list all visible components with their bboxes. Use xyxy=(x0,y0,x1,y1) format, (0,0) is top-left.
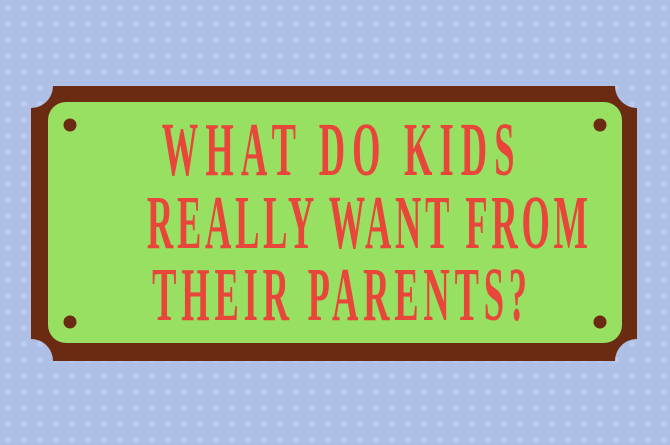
title text: WHAT DO KIDS xyxy=(162,107,515,192)
sign board xyxy=(31,86,637,361)
title text xyxy=(147,107,588,337)
screws xyxy=(64,118,606,328)
green panel xyxy=(48,102,622,343)
title text: THEIR PARENTS? xyxy=(152,252,527,337)
title text: REALLY WANT FROM xyxy=(147,180,588,265)
